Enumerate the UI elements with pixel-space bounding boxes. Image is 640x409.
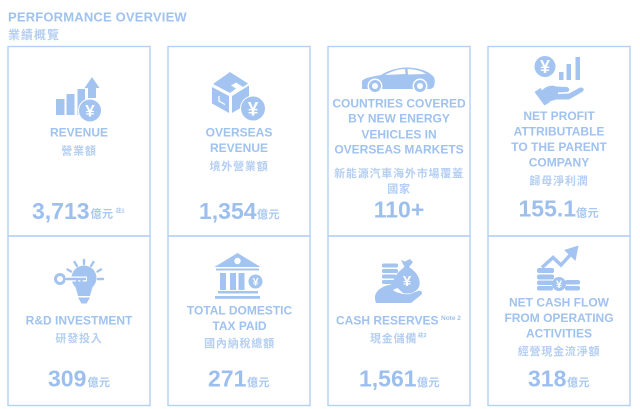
value: 億元 bbox=[257, 207, 280, 221]
chinese label: 研發投入 bbox=[55, 331, 103, 345]
label: TOTAL DOMESTIC bbox=[187, 303, 292, 317]
label: VEHICLES IN bbox=[361, 127, 437, 141]
label bbox=[332, 96, 466, 157]
chinese label: 營業額 bbox=[61, 144, 97, 158]
icon: hand with coin and bars: ¥ bbox=[540, 57, 550, 77]
panel: revenue bbox=[8, 46, 150, 236]
value bbox=[48, 366, 110, 392]
label: FROM OPERATING bbox=[504, 311, 614, 325]
icon: box with yen coin bbox=[212, 72, 266, 122]
value: 1,354 bbox=[199, 198, 257, 224]
label: COUNTRIES COVERED bbox=[332, 96, 466, 110]
title: PERFORMANCE OVERVIEW bbox=[8, 9, 187, 24]
icon: bank building with yen coin bbox=[214, 253, 262, 299]
label: R&D INVESTMENT bbox=[26, 313, 133, 327]
panel: cash reserves bbox=[328, 236, 470, 406]
value: 155.1 bbox=[518, 196, 576, 222]
value: 271 bbox=[208, 366, 247, 392]
icon: rising bars with yen coin: ¥ bbox=[85, 102, 95, 120]
label: NET PROFIT bbox=[523, 109, 595, 123]
icon: bank building with yen coin: ¥ bbox=[252, 276, 259, 288]
icon: hand with money bag bbox=[375, 259, 422, 303]
value: 3,713 bbox=[32, 198, 90, 224]
panel: net profit bbox=[488, 46, 630, 236]
label: OVERSEAS bbox=[206, 126, 272, 140]
label: ATTRIBUTABLE bbox=[514, 124, 604, 138]
chinese label: 國內納稅總額 bbox=[204, 336, 275, 350]
value: 億元 bbox=[567, 375, 590, 389]
label: OVERSEAS MARKETS bbox=[334, 143, 464, 157]
label bbox=[504, 296, 614, 340]
label: BY NEW ENERGY bbox=[348, 112, 450, 126]
chinese label: 境外營業額 bbox=[210, 159, 268, 173]
panel: countries covered bbox=[328, 46, 470, 236]
icon: key in light bulb bbox=[56, 260, 103, 304]
label: TAX PAID bbox=[212, 319, 267, 333]
value: 309 bbox=[48, 366, 86, 392]
value: 318 bbox=[528, 366, 567, 392]
value: 億元 bbox=[90, 206, 114, 220]
chinese label: 新能源汽車海外市場覆蓋 bbox=[334, 166, 464, 180]
value: 億元 bbox=[576, 206, 599, 220]
value: 億元 bbox=[247, 375, 270, 389]
value bbox=[32, 198, 125, 224]
label: NET CASH FLOW bbox=[509, 296, 610, 310]
label bbox=[511, 109, 607, 170]
label: REVENUE bbox=[50, 126, 108, 140]
chinese label bbox=[334, 166, 464, 196]
chinese label: 經營現金流淨額 bbox=[518, 344, 600, 358]
chinese label: 國家 bbox=[387, 182, 411, 196]
panel: total domestic tax bbox=[168, 236, 310, 406]
panel: R&D investment bbox=[8, 236, 150, 406]
icon: box with yen coin: ¥ bbox=[248, 100, 259, 120]
value: 110+ bbox=[374, 196, 424, 222]
chinese label: 註2 bbox=[418, 331, 427, 339]
value: 註1 bbox=[116, 206, 125, 214]
label: REVENUE bbox=[210, 141, 268, 155]
label: Note 2 bbox=[441, 315, 461, 322]
chinese label: 歸母淨利潤 bbox=[530, 174, 588, 188]
icon: coins with rising arrow: ¥ bbox=[556, 279, 563, 291]
icon: hand with coin and bars bbox=[534, 56, 584, 106]
icon: hand with money bag: ¥ bbox=[403, 273, 412, 290]
value bbox=[208, 366, 270, 392]
value: 億元 bbox=[88, 375, 110, 389]
icon: car bbox=[362, 68, 435, 94]
label: ACTIVITIES bbox=[526, 326, 592, 340]
title: 業績概覽 bbox=[8, 27, 60, 42]
label bbox=[206, 126, 272, 155]
title bbox=[8, 9, 187, 42]
label bbox=[187, 303, 292, 333]
chinese label: 現金儲備 bbox=[370, 331, 417, 345]
panel: overseas revenue bbox=[168, 46, 310, 236]
value: 1,561 bbox=[359, 366, 417, 392]
icon: rising bars with yen coin bbox=[56, 77, 102, 122]
label: COMPANY bbox=[529, 156, 589, 170]
value bbox=[528, 366, 590, 392]
label: CASH RESERVES bbox=[336, 313, 438, 327]
panel: net cash flow bbox=[488, 236, 630, 406]
icon: coins with rising arrow bbox=[537, 246, 580, 291]
label: TO THE PARENT bbox=[511, 140, 607, 154]
value: 億元 bbox=[417, 375, 440, 389]
